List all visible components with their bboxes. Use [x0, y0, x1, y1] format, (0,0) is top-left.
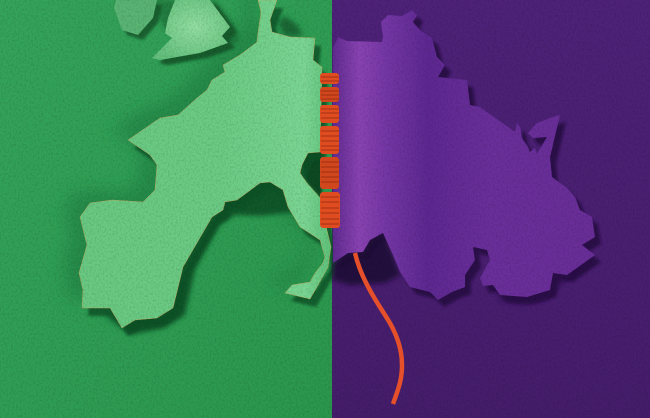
map piece: large green felt country: [79, 0, 331, 328]
thread: loose orange string hanging down: [355, 253, 402, 404]
panel: purple felt background: [332, 0, 650, 418]
map piece: small top left green island: [114, 0, 157, 35]
panel: green felt background: [0, 0, 332, 418]
purple map shadow: [333, 17, 601, 307]
map piece: large purple felt country: [333, 10, 595, 300]
green map shadows: [63, 0, 337, 336]
stitches: orange thread bundles along the seam: [320, 73, 340, 228]
map piece: top green island: [152, 0, 230, 60]
